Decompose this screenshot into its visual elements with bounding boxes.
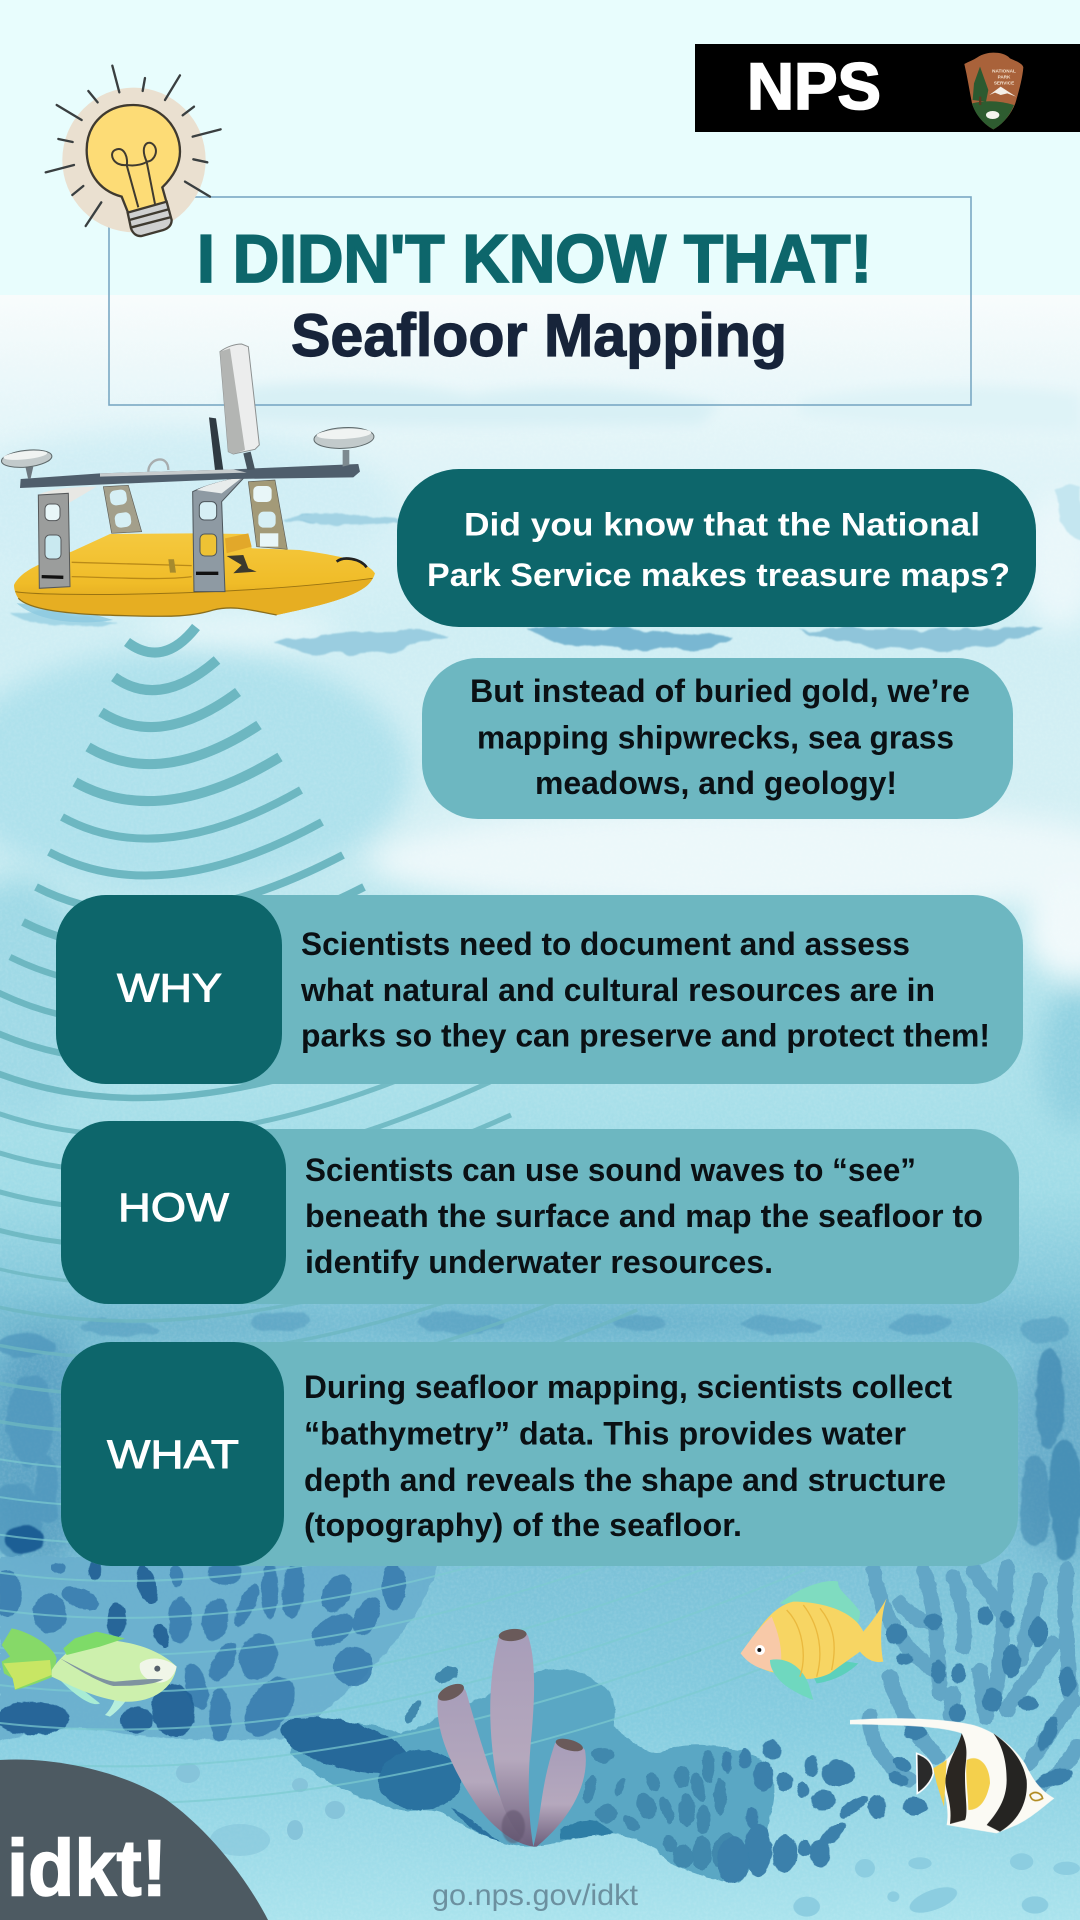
bubble: treasure maps: Park Service makes treasure maps?	[427, 557, 1010, 593]
badge: idkt	[0, 1759, 268, 1920]
text: how: identify underwater resources.	[305, 1244, 773, 1280]
bubble: buried gold: But instead of buried gold, we’re	[470, 673, 970, 709]
text: how: beneath the surface and map the seafloor to	[305, 1198, 983, 1234]
label: how	[61, 1121, 286, 1304]
text: what: depth and reveals the shape and structure	[304, 1462, 946, 1498]
sonar waves	[0, 627, 847, 1803]
NPS banner	[695, 44, 1080, 132]
title box	[109, 197, 971, 405]
panel: why	[56, 895, 1023, 1084]
icon: NPS arrowhead: PARK	[998, 75, 1011, 80]
text: what: (topography) of the seafloor.	[304, 1507, 742, 1543]
panel: how	[61, 1121, 1019, 1304]
icon: light bulb	[46, 66, 221, 236]
icon: NPS arrowhead: NATIONAL	[992, 69, 1016, 74]
text: why	[300, 926, 990, 1054]
subheading: Seafloor Mapping: Seafloor Mapping	[291, 302, 787, 369]
text: why: what natural and cultural resources are in	[300, 972, 935, 1008]
bubble: treasure maps: Did you know that the National	[464, 506, 980, 542]
label: why: WHY	[117, 966, 222, 1010]
heading: I didn't know that: I DIDN'T KNOW THAT!	[197, 221, 872, 297]
text: what	[304, 1369, 952, 1543]
website url: go.nps.gov/idkt	[432, 1879, 639, 1912]
label: what	[61, 1342, 284, 1566]
bubble: buried gold	[422, 658, 1013, 819]
panel: what	[61, 1342, 1018, 1566]
bubble: treasure maps	[397, 469, 1036, 627]
icon: NPS arrowhead: SERVICE	[994, 81, 1014, 86]
label: why	[56, 895, 282, 1084]
icon: moorish idol fish	[850, 1718, 1054, 1833]
icon: yellow fish	[741, 1581, 887, 1700]
text: why: Scientists need to document and assess	[301, 926, 910, 962]
text: what: During seafloor mapping, scientists collect	[304, 1369, 952, 1405]
bubble: buried gold: mapping shipwrecks, sea grass	[477, 720, 954, 756]
text: how: Scientists can use sound waves to “see”	[305, 1152, 916, 1188]
bubble: buried gold: meadows, and geology!	[535, 765, 897, 801]
label: how: HOW	[118, 1186, 229, 1230]
text: how	[305, 1152, 983, 1280]
icon: survey boat	[1, 344, 375, 622]
label: what: WHAT	[107, 1433, 239, 1477]
icon: NPS arrowhead	[964, 53, 1023, 129]
icon: purple sponge coral	[435, 1628, 586, 1847]
icon: green fish	[2, 1628, 177, 1717]
badge: idkt: idkt!	[7, 1824, 167, 1912]
text: what: “bathymetry” data. This provides water	[304, 1416, 906, 1452]
text: why: parks so they can preserve and protect them!	[301, 1018, 990, 1054]
NPS wordmark: NPS	[747, 49, 881, 123]
